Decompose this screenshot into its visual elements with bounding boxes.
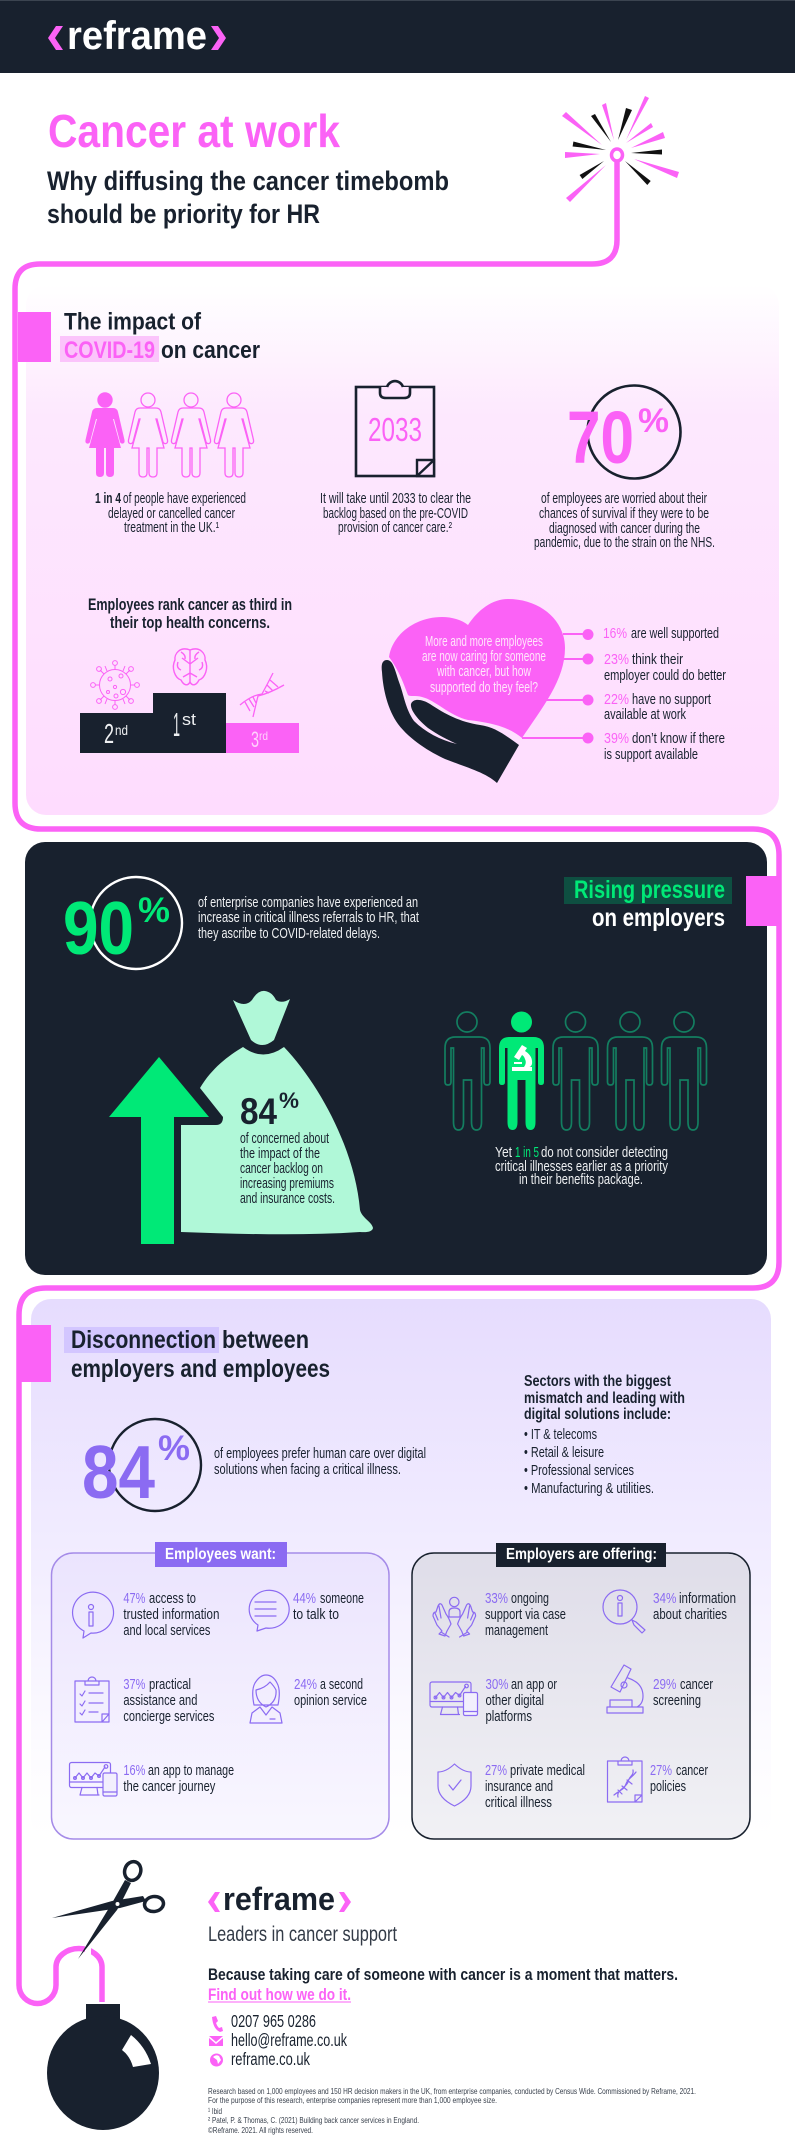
item: 24%: opinion service bbox=[294, 1693, 367, 1709]
text: until 2033: backlog based on the pre-COVID bbox=[323, 506, 468, 522]
item: 27% private: insurance and bbox=[485, 1779, 553, 1795]
text: human care: of employees prefer human care over digital bbox=[214, 1446, 426, 1462]
item: 27% private: 27% bbox=[485, 1763, 507, 1779]
text: 90 percent bbox=[198, 895, 419, 942]
panel: rising pressure background bbox=[25, 842, 767, 1275]
text: until 2033 bbox=[320, 491, 471, 536]
item: 30%: 30% bbox=[486, 1677, 509, 1693]
support callouts: 23% bbox=[604, 652, 629, 668]
heading: impact of COVID-19: on cancer bbox=[161, 337, 260, 364]
item: 44%: to talk to bbox=[293, 1607, 339, 1623]
text: sectors: • IT & telecoms bbox=[524, 1427, 597, 1443]
chart: podium: 1 bbox=[173, 706, 180, 743]
footnotes: For the purpose of this research, enterprise companies represent more than 1,000 employee size. bbox=[208, 2095, 497, 2105]
text: 1 in 4: delayed or cancelled cancer bbox=[108, 506, 235, 522]
text: 1 in 4: treatment in the UK.¹ bbox=[124, 520, 219, 536]
heading: disconnection: Disconnection bbox=[71, 1326, 216, 1354]
icon: money bag bbox=[181, 991, 373, 1234]
text: sectors bbox=[524, 1373, 685, 1497]
text: 1 in 5 bbox=[495, 1145, 669, 1188]
heading: rising pressure: Rising pressure bbox=[574, 876, 725, 904]
contact details: hello@reframe.co.uk bbox=[231, 2030, 347, 2050]
item: 24%: 24% bbox=[294, 1677, 317, 1693]
text: until 2033: provision of cancer care.² bbox=[338, 520, 452, 536]
item: 37% bbox=[75, 1677, 214, 1725]
heading: rising pressure: on employers bbox=[592, 904, 725, 932]
arrow: rising bbox=[109, 1057, 209, 1244]
stat: 84% on bag: the impact of the bbox=[240, 1146, 320, 1162]
footnotes: ² Patel, P. & Thomas, C. (2021) Building back cancer services in England. bbox=[208, 2115, 419, 2125]
text: 1 in 5: in their benefits package. bbox=[519, 1172, 643, 1188]
item: 27% policies bbox=[608, 1757, 708, 1802]
stat: 84% human care: 84 bbox=[82, 1430, 155, 1514]
item: 27% policies: cancer bbox=[676, 1763, 708, 1779]
support callouts: don’t know if there bbox=[632, 731, 725, 747]
text: heart caption: are now caring for someone bbox=[422, 649, 546, 665]
item: 27% private: private medical bbox=[510, 1763, 585, 1779]
stat: 84% on bag bbox=[240, 1088, 335, 1207]
item: 33%: 33% bbox=[485, 1591, 508, 1607]
text: 90 percent: they ascribe to COVID-related delays. bbox=[198, 926, 380, 942]
item: 37%: practical bbox=[149, 1677, 191, 1693]
stat: 84% human care bbox=[82, 1419, 201, 1514]
chart: podium: nd bbox=[115, 722, 128, 738]
text: 1 in 5: do not consider detecting bbox=[541, 1145, 668, 1161]
text: heart caption: More and more employees bbox=[425, 634, 543, 650]
item: 27% private: critical illness bbox=[485, 1795, 552, 1811]
title: Cancer at work bbox=[48, 105, 340, 157]
icon: fuse spark bbox=[562, 96, 679, 202]
icon: virus bbox=[91, 661, 139, 709]
logo: reframe: reframe bbox=[67, 14, 207, 58]
icon: brain bbox=[173, 649, 207, 685]
icon: five people bbox=[445, 1012, 706, 1130]
call to action: Find out how we do it. bbox=[208, 1986, 351, 2004]
call to action bbox=[208, 1966, 678, 2004]
support callouts: is support available bbox=[604, 747, 698, 763]
text: 90 percent: of enterprise companies have experienced an bbox=[198, 895, 418, 911]
item: 30% bbox=[430, 1677, 557, 1725]
item: 44%: someone bbox=[320, 1591, 364, 1607]
panel: disconnection background bbox=[31, 1299, 771, 1839]
text: heart caption: supported do they feel? bbox=[430, 680, 538, 696]
item: 16%: 16% bbox=[123, 1763, 145, 1779]
text: sectors: Sectors with the biggest bbox=[524, 1373, 672, 1390]
support callouts: have no support bbox=[632, 692, 711, 708]
item: 37%: 37% bbox=[123, 1677, 145, 1693]
text: human care: solutions when facing a critical illness. bbox=[214, 1462, 401, 1478]
support callouts bbox=[522, 626, 726, 763]
item: 29%: cancer bbox=[680, 1677, 713, 1693]
item: 16%: an app to manage bbox=[148, 1763, 234, 1779]
item: 33%: ongoing bbox=[511, 1591, 549, 1607]
text: heart caption: with cancer, but how bbox=[436, 664, 531, 680]
icon: microscope bbox=[512, 1045, 532, 1071]
icon: heart in hand bbox=[382, 599, 565, 783]
header bar bbox=[0, 0, 795, 73]
text: 1 in 5: 1 in 5 bbox=[515, 1145, 539, 1161]
text: 1 in 5: Yet bbox=[495, 1145, 512, 1161]
text: heart caption bbox=[422, 634, 546, 696]
heading: impact of COVID-19 bbox=[18, 308, 260, 364]
item: 29% bbox=[607, 1665, 713, 1713]
heading: employees rank cancer: Employees rank cancer as third in bbox=[88, 596, 292, 614]
item: 34%: information bbox=[679, 1591, 736, 1607]
text: sectors: digital solutions include: bbox=[524, 1406, 671, 1423]
item: 24% bbox=[250, 1675, 367, 1723]
call to action: Because taking care of someone with cancer is a moment that matters. bbox=[208, 1966, 678, 1984]
text: 70 percent: chances of survival if they were to be bbox=[539, 506, 709, 522]
item: 33% bbox=[433, 1591, 566, 1639]
chart: podium: st bbox=[182, 710, 196, 729]
heading: disconnection bbox=[18, 1325, 330, 1383]
item: 37%: concierge services bbox=[123, 1709, 214, 1725]
item: 34% bbox=[603, 1590, 736, 1633]
support callouts: available at work bbox=[604, 707, 687, 723]
heading: employees rank cancer bbox=[88, 596, 292, 632]
text: 70 percent: of employees are worried about their bbox=[541, 491, 707, 507]
item: 37%: assistance and bbox=[123, 1693, 197, 1709]
item: 29%: screening bbox=[653, 1693, 701, 1709]
icon: scissors bbox=[52, 1859, 164, 1959]
chart: podium bbox=[80, 693, 299, 753]
stat: 90%: 90 bbox=[63, 886, 134, 970]
support callouts: 16% bbox=[603, 626, 627, 642]
stat: 84% on bag: 84 bbox=[240, 1091, 277, 1132]
icon: clipboard 2033 bbox=[356, 381, 434, 476]
stat: 90%: % bbox=[138, 891, 170, 930]
footnotes: ¹ Ibid bbox=[208, 2106, 222, 2116]
item: 30%: other digital bbox=[486, 1693, 544, 1709]
text: 1 in 5: critical illnesses earlier as a priority bbox=[495, 1159, 669, 1175]
text: 90 percent: increase in critical illness referrals to HR, that bbox=[198, 910, 419, 926]
item: 30%: an app or bbox=[511, 1677, 557, 1693]
item: 16%: the cancer journey bbox=[123, 1779, 216, 1795]
stat: 84% on bag: increasing premiums bbox=[240, 1176, 334, 1192]
tag: employers offering bbox=[496, 1543, 666, 1567]
heading: impact of COVID-19: The impact of bbox=[64, 308, 202, 336]
item: 16% bbox=[70, 1762, 234, 1796]
item: 30%: platforms bbox=[486, 1709, 532, 1725]
text: 70 percent: pandemic, due to the strain on the NHS. bbox=[534, 535, 715, 551]
chart: podium: rd bbox=[259, 729, 268, 743]
item: 47%: access to bbox=[149, 1591, 196, 1607]
text: 70 percent bbox=[534, 491, 715, 551]
stat: 90% bbox=[63, 877, 182, 970]
tag: employers offering: Employers are offering: bbox=[506, 1546, 657, 1563]
support callouts: 39% bbox=[604, 731, 629, 747]
tagline: Leaders in cancer support bbox=[208, 1923, 397, 1946]
icon: globe bbox=[210, 2054, 223, 2066]
heading: impact of COVID-19: COVID-19 bbox=[64, 337, 155, 364]
chart: podium: 2 bbox=[104, 718, 114, 749]
text: 1 in 4 bbox=[95, 491, 246, 536]
stat: 70%: % bbox=[638, 402, 669, 440]
support callouts: are well supported bbox=[631, 626, 719, 642]
logo: reframe footer: reframe bbox=[223, 1881, 335, 1917]
tag: employees want: Employees want: bbox=[165, 1546, 276, 1563]
icon: four women, one filled bbox=[85, 392, 254, 477]
chart: podium: 3 bbox=[251, 727, 259, 752]
heading: disconnection: between bbox=[222, 1326, 309, 1354]
subtitle: Why diffusing the cancer timebomb bbox=[47, 166, 449, 196]
item: 33%: support via case bbox=[485, 1607, 566, 1623]
heading: disconnection: employers and employees bbox=[71, 1355, 330, 1383]
text: 1 in 4: of people have experienced bbox=[123, 491, 246, 507]
icon: mail bbox=[209, 2036, 223, 2046]
item: 47%: trusted information bbox=[123, 1607, 219, 1623]
footnotes: ©Reframe. 2021. All rights reserved. bbox=[208, 2125, 313, 2135]
text: until 2033: It will take until 2033 to clear the bbox=[320, 491, 471, 507]
item: 24%: a second bbox=[320, 1677, 363, 1693]
stat: 84% on bag: and insurance costs. bbox=[240, 1191, 335, 1207]
text: 70 percent: diagnosed with cancer during the bbox=[549, 521, 700, 537]
footnotes bbox=[208, 2086, 696, 2135]
text: 1 in 4: 1 in 4 bbox=[95, 491, 121, 507]
item: 34%: 34% bbox=[653, 1591, 677, 1607]
item: 44%: 44% bbox=[293, 1591, 316, 1607]
heading: rising pressure bbox=[564, 876, 777, 932]
item: 27% private bbox=[438, 1763, 585, 1811]
item: 47%: 47% bbox=[123, 1591, 145, 1607]
text: sectors: • Professional services bbox=[524, 1463, 634, 1479]
contact details: 0207 965 0286 bbox=[231, 2011, 316, 2031]
contact details bbox=[209, 2011, 347, 2069]
icon: phone bbox=[212, 2016, 223, 2032]
support callouts: employer could do better bbox=[604, 668, 726, 684]
stat: 84% human care: % bbox=[158, 1429, 190, 1468]
item: 44% bbox=[249, 1590, 364, 1631]
stat: 70% bbox=[567, 386, 680, 479]
text: human care bbox=[214, 1446, 426, 1478]
text: sectors: • Manufacturing & utilities. bbox=[524, 1481, 654, 1497]
heading: employees rank cancer: their top health concerns. bbox=[110, 614, 270, 632]
stat: 84% on bag: cancer backlog on bbox=[240, 1161, 323, 1177]
item: 47% bbox=[73, 1591, 219, 1639]
icon: DNA bbox=[240, 673, 284, 717]
contact details: reframe.co.uk bbox=[231, 2049, 310, 2069]
item: 27% policies: 27% bbox=[650, 1763, 672, 1779]
item: 29%: 29% bbox=[653, 1677, 677, 1693]
support callouts: 22% bbox=[604, 692, 629, 708]
panel: employees want bbox=[52, 1542, 389, 1839]
text: sectors: • Retail & leisure bbox=[524, 1445, 604, 1461]
item: 47%: and local services bbox=[123, 1623, 210, 1639]
stat: 70%: 70 bbox=[567, 396, 634, 479]
text: sectors: mismatch and leading with bbox=[524, 1390, 685, 1407]
item: 33%: management bbox=[485, 1623, 548, 1639]
panel: employers are offering bbox=[412, 1543, 750, 1839]
item: 34%: about charities bbox=[653, 1607, 727, 1623]
stat: 84% on bag: of concerned about bbox=[240, 1131, 329, 1147]
icon: bomb bbox=[47, 2004, 159, 2130]
tag: employees want bbox=[155, 1542, 287, 1567]
support callouts: think their bbox=[632, 652, 683, 668]
subtitle: should be priority for HR bbox=[47, 199, 320, 229]
stat: 84% on bag: % bbox=[279, 1088, 299, 1113]
item: 27% policies: policies bbox=[650, 1779, 686, 1795]
panel: impact of COVID background bbox=[26, 285, 779, 815]
icon: clipboard 2033: 2033 bbox=[368, 411, 422, 448]
subtitle bbox=[47, 166, 449, 229]
